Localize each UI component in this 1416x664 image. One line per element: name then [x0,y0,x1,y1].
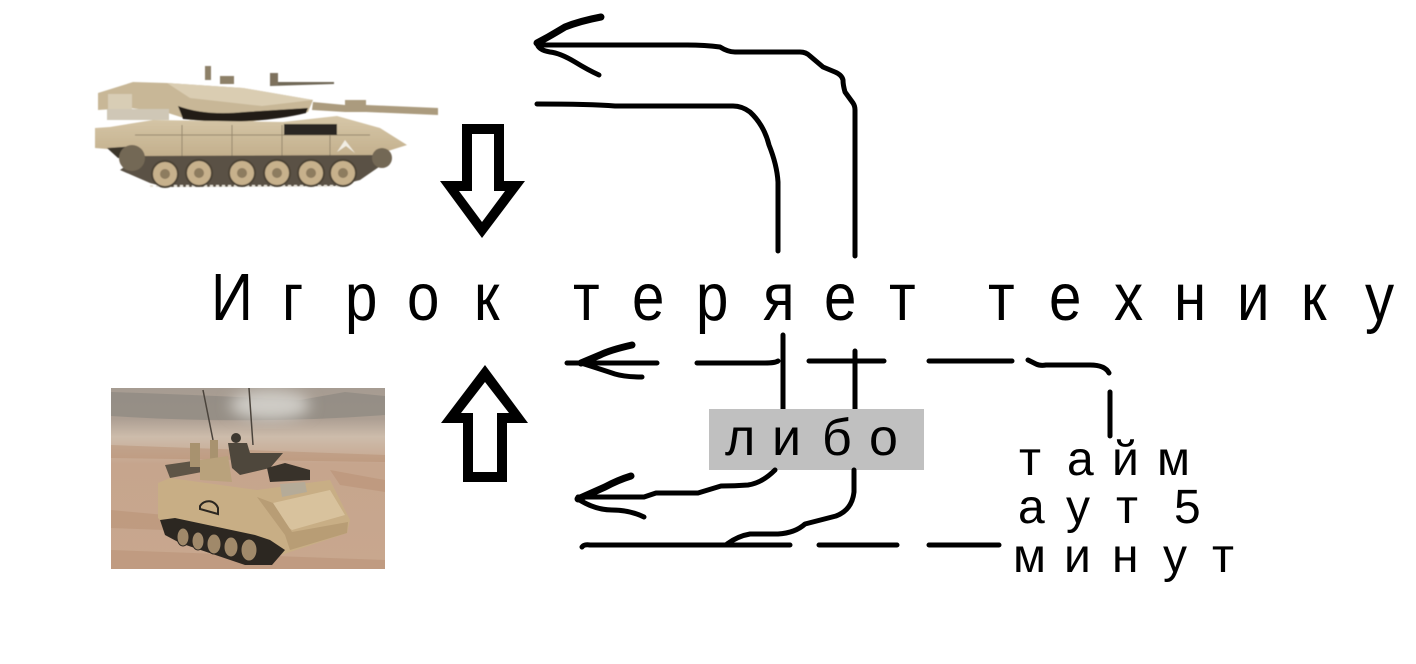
timeout label [1013,433,1234,583]
arrow: tank down to text [440,124,525,238]
title clip edge [1397,270,1416,340]
lines from text to either box [783,335,855,409]
timeout label: минут [1013,530,1234,583]
tank illustration [95,66,438,187]
dashed arrow: timeout to text [567,345,1110,436]
upper curve from loss to tank [537,104,778,251]
main title: Игрок теряет технику [211,260,1395,335]
top curved arrow: tank returns [537,17,855,256]
dashed line: from либо to timeout [582,470,999,547]
box: либо: либо [725,409,898,467]
timeout label: тайм [1019,433,1190,486]
arrow: APC up to text [441,365,528,482]
curved arrow: from либо [578,470,775,517]
timeout label: аут 5 [1018,481,1201,534]
APC photo [111,388,385,569]
